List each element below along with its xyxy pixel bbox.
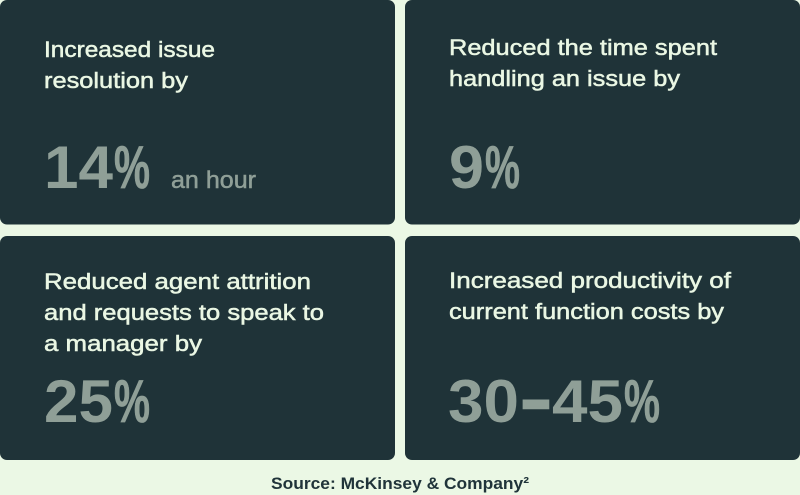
heading: increased productivity: Increased productivity of	[449, 268, 732, 293]
heading: reduced agent attrition	[44, 269, 324, 356]
panel: issue resolution	[0, 0, 395, 224]
stat: 25%	[44, 368, 150, 435]
stat: 25%: 25	[44, 368, 113, 435]
stat: 25%: %	[114, 368, 150, 435]
heading: increased productivity: current function costs by	[449, 299, 724, 324]
stat: 9%	[449, 134, 520, 201]
heading: reduced time spent: Reduced the time spent	[449, 35, 717, 60]
stat: 30-45%	[448, 366, 660, 435]
panel: agent attrition	[0, 236, 395, 460]
heading: reduced time spent: handling an issue by	[449, 66, 680, 91]
heading: reduced agent attrition: a manager by	[44, 331, 202, 356]
heading: increased issue resolution: Increased issue	[44, 37, 215, 62]
stat: 30-45%: 45	[552, 368, 623, 435]
stat: 14% an hour: %	[114, 134, 150, 201]
stat: 30-45%: %	[624, 368, 660, 435]
heading: reduced agent attrition: and requests to speak to	[44, 300, 324, 325]
heading: increased issue resolution: resolution by	[44, 68, 188, 93]
heading: increased productivity	[449, 268, 732, 324]
source line: Source: McKinsey & Company²	[271, 474, 529, 493]
stat: 9%: %	[485, 134, 520, 201]
heading: reduced agent attrition: Reduced agent attrition	[44, 269, 311, 294]
heading: reduced time spent	[449, 35, 717, 91]
panel: handling time	[405, 0, 800, 224]
stat: 30-45%: -	[521, 366, 551, 433]
stat: 14% an hour	[44, 134, 256, 201]
stat: 14% an hour: 14	[44, 134, 114, 201]
stat: 9%: 9	[449, 134, 484, 201]
stat: 30-45%: 30	[448, 368, 519, 435]
panel: productivity	[405, 236, 800, 460]
heading: increased issue resolution	[44, 37, 215, 93]
stat: 14% an hour: an hour	[171, 167, 256, 194]
